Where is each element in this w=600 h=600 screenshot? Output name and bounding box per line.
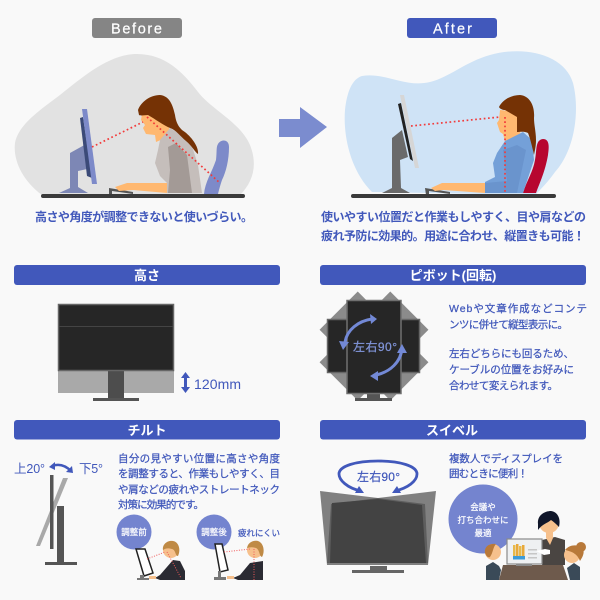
- tilt description: 自分の見やすい位置に高さや角度: [118, 452, 280, 465]
- stand: [355, 393, 392, 401]
- tilt description: 対策に効果的です。: [118, 498, 204, 511]
- desk: [41, 194, 245, 198]
- keyboard: [425, 188, 450, 195]
- badge: meetings: 打ち合わせに: [457, 515, 509, 525]
- woman: [431, 95, 536, 193]
- icon: meeting scene: [485, 511, 586, 580]
- icon: man after adjustment: [214, 541, 264, 580]
- panel: after illustration: [345, 51, 576, 198]
- pivot description: Webや文章作成などコンテ: [449, 302, 587, 315]
- pivot description: 左右どちらにも回るため、: [449, 347, 574, 360]
- chart: height adjustment monitor: [58, 304, 174, 401]
- arrow: before to after: [279, 107, 327, 148]
- tilt up label: 上20°: [14, 462, 45, 476]
- rotation arrows: [345, 319, 402, 375]
- rotated ghost monitors: [320, 292, 428, 400]
- woman: [115, 95, 202, 193]
- heading: swivel: スイベル: [426, 423, 478, 438]
- tilt description: や肩などの疲れやストレートネック: [118, 483, 280, 496]
- heading: pivot: ピボット(回転): [410, 268, 496, 283]
- sight lines: [411, 117, 505, 197]
- icon: man before adjustment: [136, 541, 185, 580]
- background blob: [15, 54, 254, 195]
- sight lines: [92, 117, 220, 183]
- right person: [567, 563, 580, 580]
- background blob: [345, 51, 576, 195]
- monitor: [382, 95, 419, 193]
- panel: before illustration: [15, 54, 254, 198]
- rotation label: 左右90°: [353, 339, 397, 354]
- swivel description: 囲むときに便利！: [449, 467, 528, 480]
- pivot description: [449, 302, 587, 392]
- before label: [92, 18, 182, 38]
- pivot description: ンツに併せて縦型表示に。: [449, 318, 568, 331]
- badge: after adjustment: 調整後: [201, 527, 227, 537]
- badge: meetings: 最適: [474, 528, 492, 538]
- swivel description: 複数人でディスプレイを: [449, 452, 563, 465]
- heading: height: [14, 265, 280, 285]
- pointing hand: [536, 549, 550, 555]
- chart: swivel monitor: [320, 461, 436, 573]
- after caption: 疲れ予防に効果的。用途に合わせ、縦置きも可能！: [321, 228, 585, 243]
- badge: meetings: 会議や: [470, 502, 496, 512]
- chart: tilt diagram: [14, 462, 103, 565]
- after label: [407, 18, 497, 38]
- after label: After: [433, 22, 472, 38]
- tilted panel: [36, 478, 68, 546]
- chart: pivot monitor: [320, 292, 428, 401]
- heading: tilt: [14, 420, 280, 440]
- heading: pivot: [320, 265, 586, 285]
- standing man: [542, 537, 565, 565]
- desk: [351, 194, 556, 198]
- swivel label: 左右90°: [357, 469, 400, 484]
- left person: [486, 562, 501, 580]
- stand: [45, 475, 77, 565]
- icon: height arrow: [181, 372, 190, 393]
- monitor: [59, 109, 97, 193]
- keyboard: [109, 188, 133, 195]
- chair: [204, 141, 229, 194]
- tilt description: [118, 452, 280, 511]
- after caption: 使いやすい位置だと作業もしやすく、目や肩などの: [321, 209, 586, 224]
- pivot description: 合わせて変えられます。: [449, 379, 558, 392]
- badge: after adjustment: [196, 514, 232, 550]
- icon: tilt arrow: [49, 462, 73, 473]
- badge: meetings: [448, 484, 518, 554]
- icon: swivel arrow: [339, 461, 417, 491]
- badge: before adjustment: 調整前: [121, 527, 147, 537]
- note: less tiring: 疲れにくい: [238, 528, 280, 538]
- table: [499, 565, 568, 580]
- tilt description: を調整すると、作業もしやすく、目: [118, 467, 280, 480]
- tilt down label: 下5°: [79, 462, 103, 476]
- badge: before adjustment: [116, 514, 152, 550]
- height value: 120mm: [194, 376, 241, 392]
- before label: Before: [111, 22, 162, 38]
- after caption: [321, 209, 586, 243]
- monitor with chart: [507, 539, 542, 564]
- landscape monitor: [328, 320, 420, 372]
- heading: swivel: [320, 420, 586, 440]
- heading: height: 高さ: [134, 268, 160, 283]
- heading: tilt: チルト: [127, 423, 167, 438]
- chair: [523, 139, 549, 193]
- portrait monitor: [347, 300, 401, 394]
- before caption: 高さや角度が調整できないと使いづらい。: [35, 209, 253, 224]
- pivot description: ケーブルの位置をお好みに: [449, 363, 574, 376]
- swivel description: [449, 452, 563, 480]
